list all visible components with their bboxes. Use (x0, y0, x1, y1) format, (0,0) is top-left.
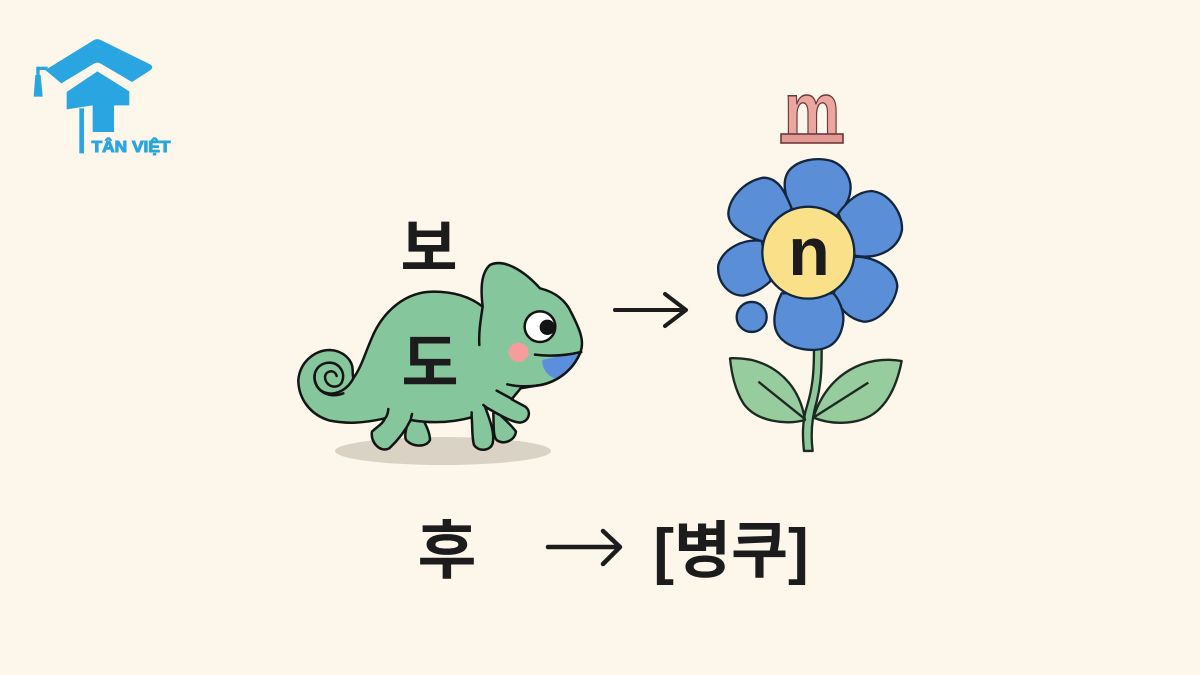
right leaf (813, 360, 902, 423)
arrow: bottom pronunciation (548, 531, 620, 564)
flower stem (803, 348, 822, 451)
illustration: flower (718, 159, 902, 451)
chameleon shadow (335, 437, 551, 465)
chameleon cheek (509, 343, 529, 362)
illustration: chameleon (298, 263, 582, 450)
left leaf (730, 358, 805, 422)
logo wordmark: TÂN VIỆT (92, 137, 171, 156)
chameleon body (298, 263, 582, 450)
letter m on a base: m (784, 68, 840, 153)
flower centre (762, 207, 854, 299)
small round bud (737, 302, 767, 332)
chameleon jaw edge (537, 352, 581, 386)
letter n in flower centre: n (788, 214, 830, 290)
icon: mortarboard and arrow (34, 39, 152, 153)
chameleon back legs (405, 412, 516, 446)
syllable above chameleon: 보 (400, 215, 458, 284)
syllable on chameleon body: 도 (401, 330, 459, 399)
chameleon markings (314, 307, 537, 420)
arrow: chameleon to flower (615, 294, 686, 326)
logo: Tan Viet graduation cap (34, 39, 152, 153)
chameleon throat (542, 354, 580, 378)
chameleon eye (525, 311, 555, 342)
petals (718, 159, 902, 350)
bottom pronunciation: [병쿠] (653, 517, 809, 586)
bottom syllable: 후 (418, 515, 476, 587)
chameleon mouth (535, 352, 581, 356)
